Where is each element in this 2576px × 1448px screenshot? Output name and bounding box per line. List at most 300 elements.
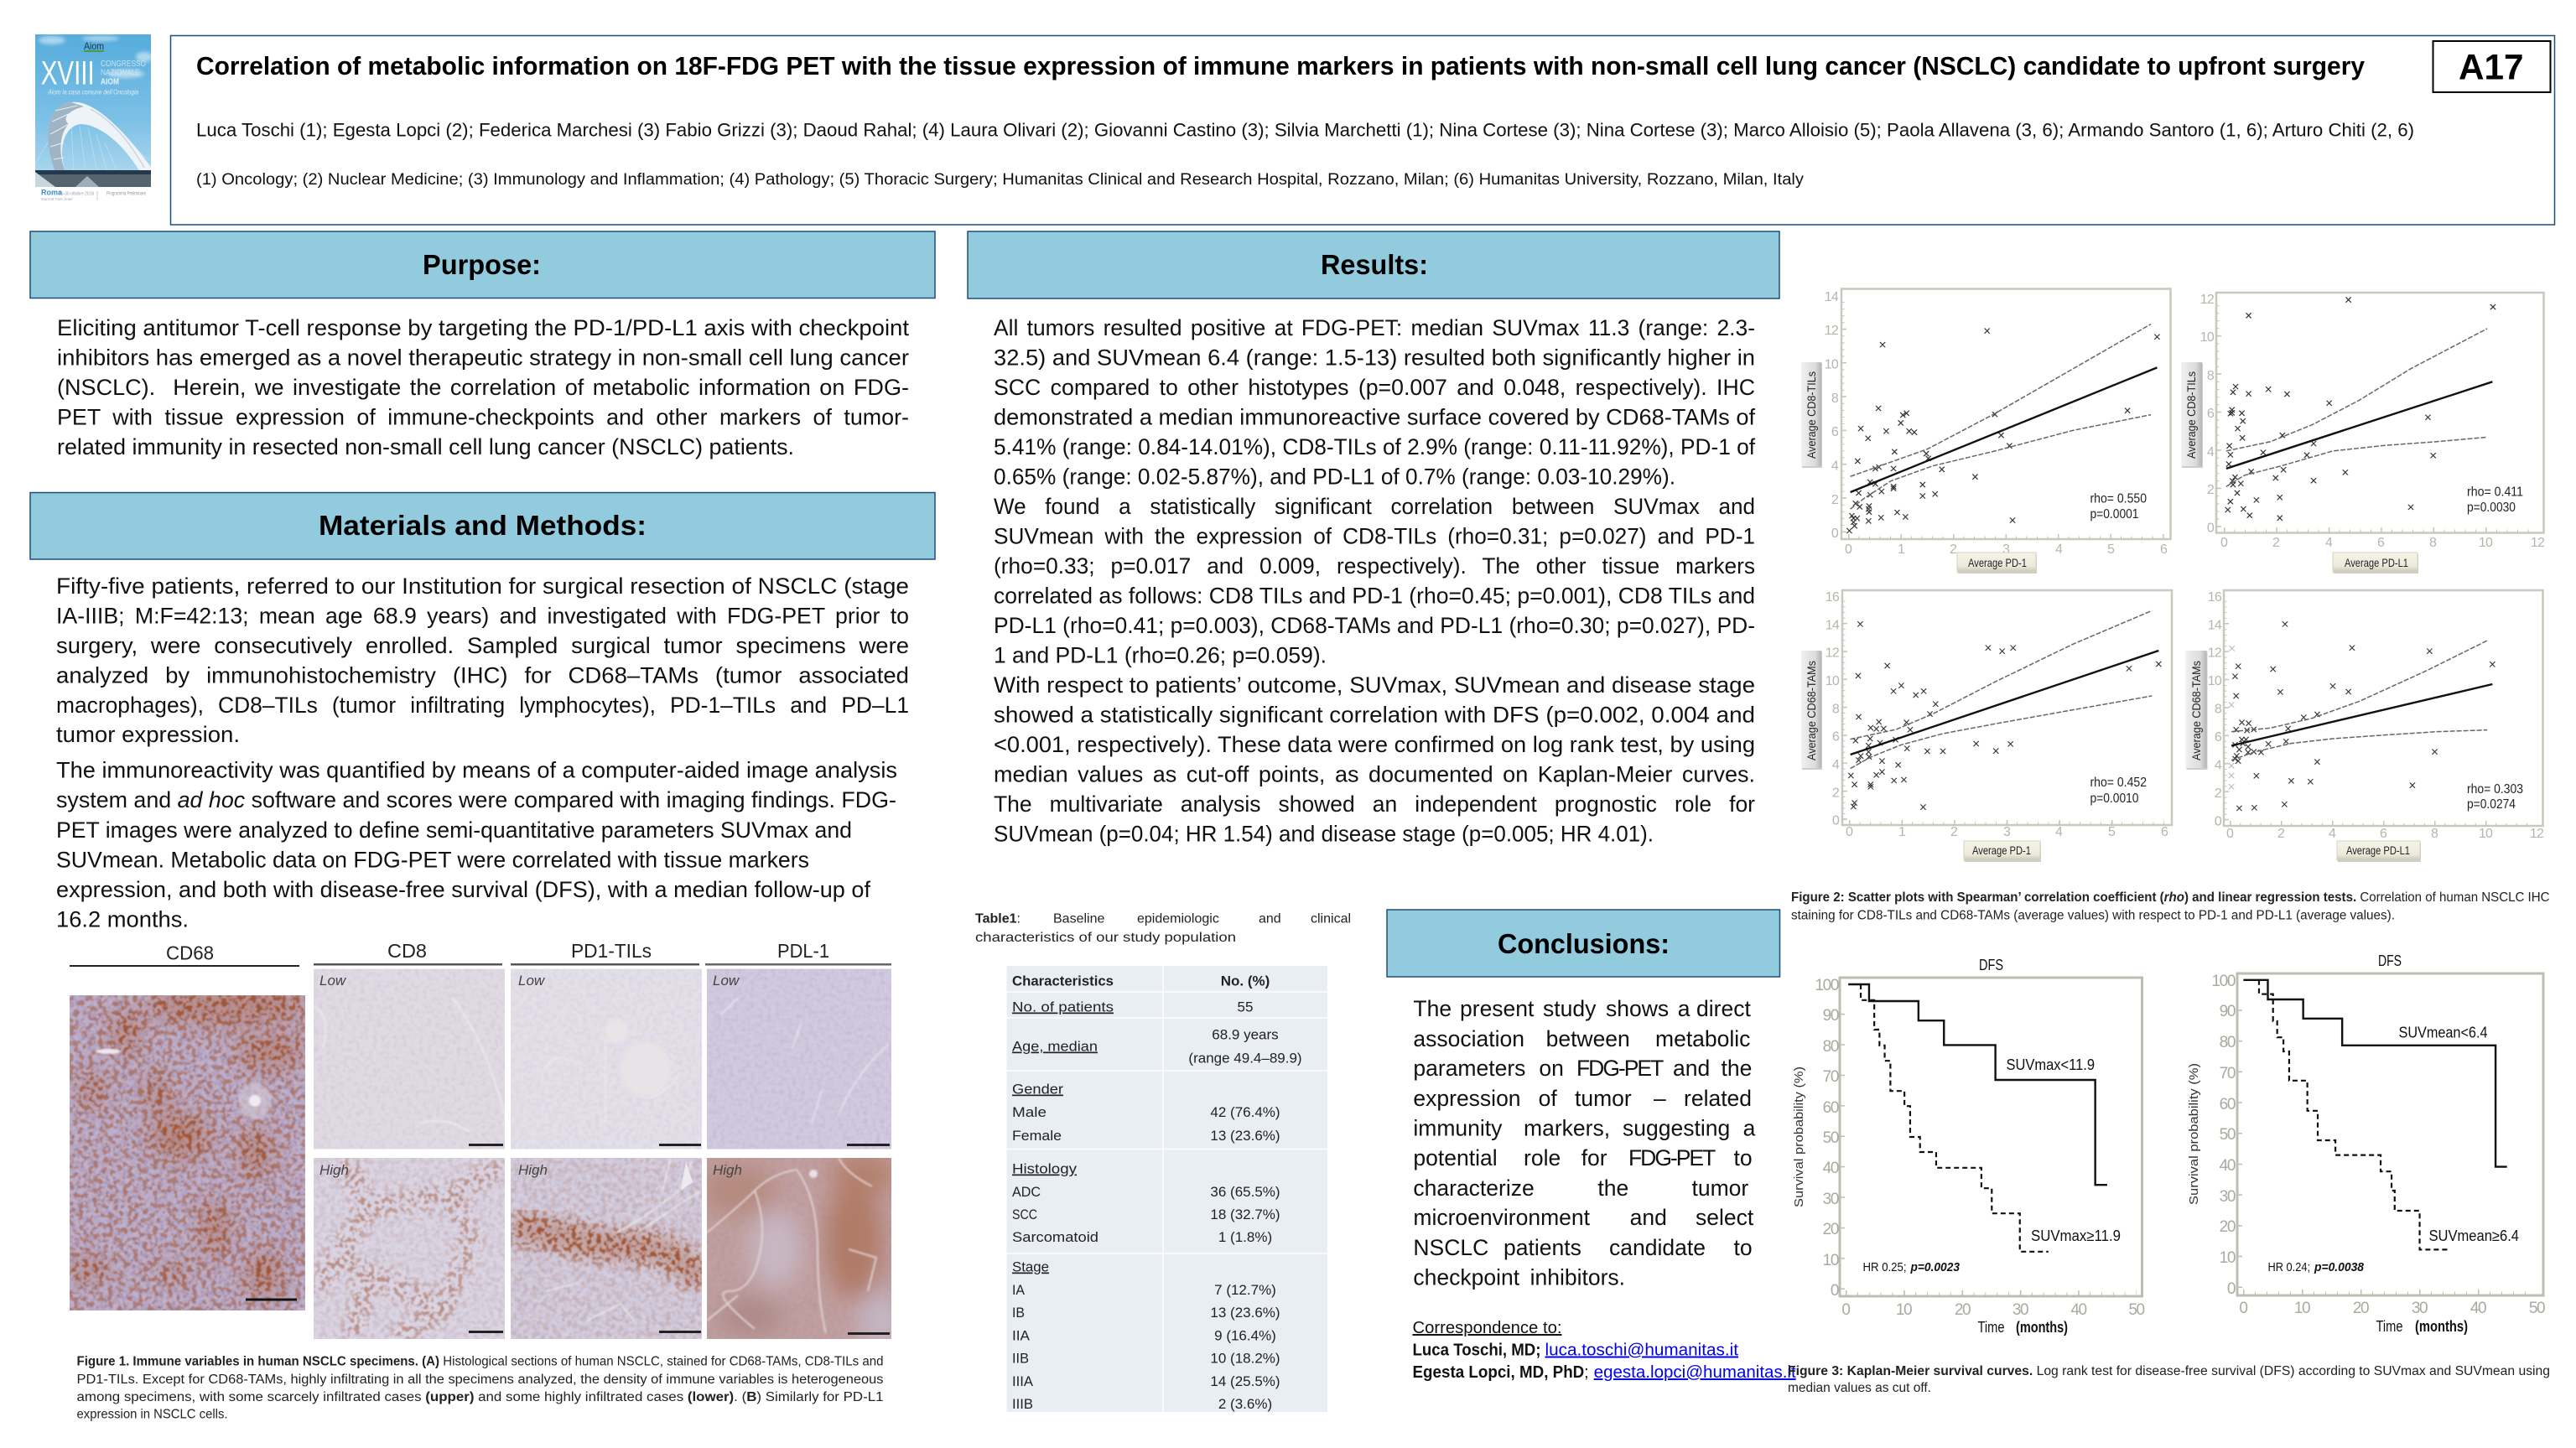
- table: baseline characteristics: (range 49.4–89.9): [1188, 1050, 1302, 1067]
- scatter plot: CD68-TAMs vs PD-1: 14: [1826, 618, 1840, 632]
- correlation annotation: rho= 0.452: [2090, 776, 2147, 790]
- text: Conclusions: candidate: [1609, 1235, 1706, 1260]
- text: Conclusions: between: [1546, 1026, 1630, 1051]
- x axis button: [2333, 553, 2418, 573]
- heading: Results: Results:: [1321, 249, 1428, 280]
- hazard ratio: p=0.0023: [1910, 1260, 1961, 1274]
- scatter plot: CD68-TAMs vs PD-L1: [2185, 590, 2544, 862]
- correlation annotation: p=0.0010: [2090, 791, 2139, 806]
- x axis button: Average PD-1: [1968, 556, 2027, 569]
- table: baseline characteristics: IIIB: [1012, 1396, 1033, 1412]
- scatter plot: CD68-TAMs vs PD-L1: 14: [2208, 618, 2222, 632]
- scatter plot: CD68-TAMs vs PD-1: 1: [1898, 825, 1906, 839]
- table: baseline characteristics: SCC: [1012, 1207, 1037, 1222]
- scatter plot: CD8-TILs vs PD-1: 5: [2107, 542, 2115, 557]
- scatter plot: CD8-TILs vs PD-1: 10: [1825, 357, 1839, 372]
- congress poster thumbnail: AIOM: [101, 77, 119, 86]
- text: Conclusions: potential: [1413, 1145, 1498, 1170]
- Kaplan-Meier plot: SUVmean: 60: [2220, 1096, 2236, 1113]
- congress poster thumbnail: Marriott Park Hotel: [41, 197, 73, 201]
- table: baseline characteristics: 36 (65.5%): [1210, 1184, 1280, 1200]
- text: Results: <0.001, respectively). These data were confirmed on log rank test, by using: [994, 732, 1755, 757]
- hazard ratio: [2267, 1260, 2365, 1274]
- table: baseline characteristics: 13 (23.6%): [1210, 1305, 1280, 1321]
- table: baseline characteristics: 14 (25.5%): [1210, 1373, 1280, 1389]
- text: Conclusions: NSCLC: [1413, 1235, 1488, 1260]
- text: Materials and Methods: [56, 573, 909, 932]
- figure 3 caption: [1788, 1364, 2550, 1395]
- scatter plot: CD68-TAMs vs PD-L1: 16: [2208, 590, 2222, 605]
- Kaplan-Meier plot: SUVmax: 0: [1831, 1282, 1839, 1300]
- x axis button: [2337, 841, 2421, 862]
- table: baseline characteristics: IIA: [1012, 1328, 1031, 1343]
- text: Conclusions: metabolic: [1655, 1026, 1750, 1051]
- text: Conclusions: inhibitors.: [1530, 1264, 1625, 1290]
- text: Conclusions: expression: [1413, 1086, 1521, 1111]
- scatter plot: CD68-TAMs vs PD-1: 16: [1826, 590, 1840, 605]
- authors: Luca Toschi (1); Egesta Lopci (2); Federica Marchesi (3) Fabio Grizzi (3); Daoud Rahal; (4) Laura Olivari (2); Giovanni Castino (3); Silvia Marchetti (1); Nina Cortese (3); Nina Cortese (3); Marco Alloisio (5); Paola Allavena (3, 6); Armando Santoro (1, 6); Arturo Chiti (2, 6): [196, 119, 2414, 141]
- Kaplan-Meier plot: SUVmean: 40: [2470, 1300, 2486, 1317]
- text: Conclusions: role: [1524, 1145, 1561, 1170]
- table: baseline characteristics: 18 (32.7%): [1210, 1207, 1280, 1222]
- correlation annotation: [2467, 782, 2523, 812]
- curve labels: [2006, 1056, 2121, 1244]
- congress poster thumbnail: NAZIONALE: [101, 68, 140, 77]
- scatter plot: CD8-TILs vs PD-L1: 2: [2272, 536, 2280, 550]
- scatter plot: CD68-TAMs vs PD-1: 0: [1832, 814, 1840, 828]
- scatter plot: CD8-TILs vs PD-1: 6: [2160, 542, 2168, 557]
- text: Purpose: [57, 315, 909, 459]
- scatter plot: CD68-TAMs vs PD-1: 6: [1832, 730, 1840, 745]
- affiliations: (1) Oncology; (2) Nuclear Medicine; (3) Immunology and Inflammation; (4) Pathology; (5) Thoracic Surgery; Humanitas Clinical and Research Hospital, Rozzano, Milan; (6) Humanitas University, Rozzano, Milan, Italy: [196, 171, 1805, 189]
- figure 1 caption: expression in NSCLC cells.: [77, 1407, 228, 1422]
- scatter plot: CD8-TILs vs PD-1: 0: [1831, 527, 1839, 541]
- table caption: epidemiologic: [1137, 912, 1219, 926]
- x axis label: (months): [2016, 1319, 2068, 1336]
- scatter plot: CD8-TILs vs PD-1: 8: [1831, 392, 1839, 406]
- Kaplan-Meier plot: SUVmean: 10: [2220, 1249, 2236, 1267]
- panel: PD1 low: [511, 969, 702, 1149]
- hazard ratio: [1863, 1260, 1961, 1274]
- text: Results: SCC compared to other histotypes (p=0.007 and 0.048, respectively). IHC: [994, 375, 1755, 400]
- congress poster thumbnail: Roma: [41, 188, 63, 196]
- text: Results: We found a statistically significant correlation between SUVmax and: [994, 494, 1755, 519]
- panel: PDL-1 high: High: [713, 1162, 742, 1178]
- figure 1 caption: PD1-TILs. Except for CD68-TAMs, highly infiltrating in all the specimens analyzed, the density of immune variables is heterogeneous: [77, 1373, 884, 1387]
- text: Conclusions: select: [1696, 1205, 1754, 1230]
- scatter plot: CD68-TAMs vs PD-1: 10: [1826, 674, 1840, 688]
- text: Results: SUVmean with the expression of CD8-TILs (rho=0.31; p=0.027) and PD-1: [994, 523, 1755, 548]
- text: Results: SUVmean (p=0.04; HR 1.54) and disease stage (p=0.005; HR 4.01).: [994, 822, 1654, 847]
- scatter plot: CD8-TILs vs PD-1: 1: [1898, 542, 1905, 557]
- heading: Conclusions: Conclusions:: [1498, 928, 1670, 959]
- Kaplan-Meier plot: SUVmean: 50: [2220, 1126, 2236, 1144]
- text: Conclusions: to: [1734, 1235, 1753, 1260]
- scatter plot: CD68-TAMs vs PD-L1: 12: [2208, 646, 2222, 661]
- Kaplan-Meier plot: SUVmax: 40: [2070, 1301, 2086, 1319]
- correlation annotation: rho= 0.411: [2467, 485, 2523, 500]
- figure 2 caption: Figure 2: Scatter plots with Spearman’ correlation coefficient (rho) and linear regression tests. Correlation of human NSCLC IHC: [1791, 890, 2549, 905]
- table: baseline characteristics: IIIA: [1012, 1373, 1034, 1389]
- table caption line 2: characteristics of our study population: [975, 931, 1236, 945]
- x axis button: Average PD-1: [1972, 843, 2031, 857]
- correspondence: Egesta Lopci, MD, PhD;: [1412, 1363, 1588, 1382]
- Kaplan-Meier plot: SUVmean: 0: [2227, 1280, 2236, 1298]
- text: Results: median values as cut-off points, as documented on Kaplan-Meier curves.: [994, 761, 1755, 786]
- text: Conclusions: parameters: [1413, 1056, 1525, 1081]
- correlation annotation: rho= 0.303: [2467, 782, 2523, 797]
- heading: Results: [968, 231, 1779, 298]
- y axis button: [1801, 362, 1822, 468]
- scatter plot: CD8-TILs vs PD-1: 4: [1831, 459, 1839, 473]
- text: Conclusions: patients: [1504, 1235, 1581, 1260]
- text: Results: [994, 315, 1756, 847]
- correlation annotation: [2467, 485, 2523, 515]
- panel: CD8 low: Low: [319, 973, 347, 989]
- plot title: DFS: [1979, 957, 2003, 973]
- table: baseline characteristics: IIB: [1012, 1350, 1029, 1367]
- curve labels: SUVmax≥11.9: [2031, 1227, 2121, 1244]
- table: baseline characteristics: Male: [1012, 1104, 1046, 1120]
- panel: CD8 high: [314, 1158, 505, 1339]
- text: Results: 1 and PD-L1 (rho=0.26; p=0.059).: [994, 642, 1327, 667]
- panel: PD1 high: [511, 1158, 702, 1339]
- x axis label: Time: [1977, 1319, 2004, 1336]
- scatter plot: CD68-TAMs vs PD-1: [1801, 590, 2172, 862]
- plot title: DFS: [2378, 952, 2402, 969]
- text: Materials and Methods: macrophages), CD8–TILs (tumor infiltrating lymphocytes), PD-1–TILs and PD–L1: [56, 693, 909, 718]
- panel: PDL-1 low: [707, 969, 891, 1149]
- x axis label: (months): [2415, 1318, 2468, 1335]
- congress poster thumbnail: XVIII: [41, 55, 95, 92]
- Kaplan-Meier plot: SUVmax: 90: [1823, 1007, 1839, 1025]
- heading: Materials and Methods: [30, 493, 935, 559]
- text: Conclusions: a: [1678, 996, 1690, 1021]
- Kaplan-Meier plot: SUVmax: 20: [1823, 1221, 1839, 1238]
- column headers: CD68: [166, 942, 214, 964]
- table: baseline characteristics: IB: [1012, 1305, 1025, 1321]
- text: Purpose: Eliciting antitumor T-cell response by targeting the PD-1/PD-L1 axis with checkpoint: [57, 315, 909, 340]
- scatter plot: CD68-TAMs vs PD-1: 3: [2003, 825, 2011, 839]
- scatter plot: CD8-TILs vs PD-L1: 10: [2479, 536, 2493, 550]
- Kaplan-Meier plot: SUVmean: 20: [2220, 1218, 2236, 1236]
- Kaplan-Meier plot: SUVmean: 30: [2220, 1188, 2236, 1206]
- figure 2 caption: [1791, 890, 2549, 922]
- text: Results: 32.5) and SUVmean 6.4 (range: 1.5-13) resulted both significantly higher in: [994, 345, 1755, 371]
- x axis label: [1977, 1319, 2068, 1336]
- table: baseline characteristics: 13 (23.6%): [1210, 1128, 1280, 1144]
- table: baseline characteristics: Histology: [1012, 1160, 1078, 1177]
- figure 3 caption: median values as cut off.: [1788, 1381, 1931, 1395]
- correspondence: Correspondence to:: [1412, 1319, 1561, 1337]
- heading: Conclusions: [1387, 910, 1779, 977]
- Kaplan-Meier plot: SUVmax: 10: [1823, 1252, 1839, 1269]
- Kaplan-Meier plot: SUVmean: 10: [2294, 1300, 2310, 1317]
- Kaplan-Meier plot: SUVmax: 10: [1896, 1301, 1912, 1319]
- figure 3 caption: Figure 3: Kaplan-Meier survival curves. Log rank test for disease-free survival (DFS) according to SUVmax and SUVmean using: [1788, 1364, 2550, 1378]
- curve labels: SUVmax<11.9: [2006, 1056, 2095, 1073]
- table caption: :: [1016, 912, 1021, 926]
- correspondence: Luca Toschi, MD;: [1412, 1342, 1541, 1360]
- scatter plot: CD8-TILs vs PD-1: 3: [2002, 542, 2010, 557]
- curve labels: SUVmean≥6.4: [2428, 1227, 2519, 1244]
- scatter plot: CD68-TAMs vs PD-L1: 10: [2208, 674, 2222, 688]
- table caption: Table1: [975, 912, 1017, 926]
- text: Conclusions: to: [1734, 1145, 1753, 1170]
- curve labels: SUVmean<6.4: [2398, 1025, 2487, 1041]
- correlation annotation: [2090, 776, 2147, 806]
- text: Conclusions: and: [1673, 1056, 1710, 1081]
- correspondence: egesta.lopci@humanitas.it: [1594, 1363, 1796, 1382]
- scatter plot: CD68-TAMs vs PD-L1: 0: [2215, 814, 2222, 828]
- y axis button: Average CD8-TILs: [1805, 371, 1818, 459]
- congress poster thumbnail: [35, 34, 153, 201]
- hazard ratio: HR 0.25;: [1863, 1260, 1907, 1274]
- heading: Purpose: Purpose:: [423, 249, 541, 280]
- text: Materials and Methods: expression, and both with disease-free survival (DFS), with a median follow-up of: [56, 877, 870, 902]
- title: Correlation of metabolic information on 18F-FDG PET with the tissue expression of immune markers in patients with non-small cell lung cancer (NSCLC) candidate to upfront surgery: [196, 51, 2366, 80]
- text: Results: The multivariate analysis showed an independent prognostic role for: [994, 791, 1755, 817]
- Kaplan-Meier plot: SUVmax: 80: [1823, 1038, 1839, 1056]
- text: Purpose: (NSCLC). Herein, we investigate the correlation of metabolic information on FDG-: [57, 375, 909, 400]
- figure 2 caption: staining for CD8-TILs and CD68-TAMs (average values) with respect to PD-1 and PD-L1 (average values).: [1791, 909, 2395, 922]
- scatter plot: CD68-TAMs vs PD-L1: 4: [2215, 758, 2222, 773]
- text: Conclusions: [1413, 996, 1756, 1290]
- scatter plot: CD8-TILs vs PD-1: 6: [1831, 425, 1839, 439]
- table: baseline characteristics: 7 (12.7%): [1214, 1282, 1276, 1298]
- text: Conclusions: the: [1721, 1056, 1752, 1081]
- text: Conclusions: tumor: [1692, 1176, 1748, 1201]
- Kaplan-Meier plot: SUVmax: 20: [1955, 1301, 1971, 1319]
- scatter plot: CD8-TILs vs PD-1: 2: [1950, 542, 1957, 557]
- correlation annotation: rho= 0.550: [2090, 491, 2147, 506]
- panel: PD1 low: Low: [518, 973, 546, 989]
- scatter plot: CD68-TAMs vs PD-L1: 8: [2431, 827, 2438, 841]
- Kaplan-Meier plot: SUVmean: 50: [2529, 1300, 2545, 1317]
- scatter plot: CD8-TILs vs PD-1: 4: [2055, 542, 2063, 557]
- table: baseline characteristics: Female: [1012, 1128, 1062, 1144]
- scatter plot: CD68-TAMs vs PD-1: 2: [1832, 786, 1840, 800]
- scatter plot: CD68-TAMs vs PD-1: 0: [1846, 825, 1853, 839]
- text: Conclusions: shows: [1606, 996, 1669, 1021]
- Kaplan-Meier plot: SUVmax: 50: [2128, 1301, 2144, 1319]
- panel: CD8 high: High: [319, 1162, 349, 1178]
- congress poster thumbnail: Programma Preliminare: [106, 192, 146, 197]
- scatter plot: CD68-TAMs vs PD-1: 8: [1832, 702, 1840, 716]
- correlation annotation: p=0.0030: [2467, 501, 2516, 515]
- scatter plot: CD8-TILs vs PD-L1: 6: [2377, 536, 2385, 550]
- Kaplan-Meier plot: SUVmax: 50: [1823, 1129, 1839, 1147]
- y axis label: Survival probability (%): [1792, 1067, 1806, 1207]
- text: Conclusions: direct: [1696, 996, 1751, 1021]
- scatter plot: CD8-TILs vs PD-1: 0: [1845, 542, 1852, 557]
- scatter plot: CD68-TAMs vs PD-1: 5: [2108, 825, 2116, 839]
- panel: PDL-1 low: Low: [713, 973, 740, 989]
- scatter plot: CD8-TILs vs PD-L1: 10: [2200, 330, 2215, 345]
- table: baseline characteristics: 9 (16.4%): [1214, 1328, 1276, 1343]
- Kaplan-Meier plot: SUVmean: 40: [2220, 1157, 2236, 1175]
- poster code badge: A17: [2459, 48, 2524, 88]
- text: Conclusions: and: [1630, 1205, 1667, 1230]
- congress poster thumbnail: CONGRESSO: [101, 60, 146, 69]
- scatter plot: CD8-TILs vs PD-L1: 6: [2207, 407, 2215, 421]
- Kaplan-Meier plot: SUVmean: 90: [2220, 1003, 2236, 1020]
- text: Conclusions: related: [1684, 1086, 1752, 1111]
- congress poster thumbnail: Aiom: [84, 40, 104, 52]
- scatter plot: CD68-TAMs vs PD-1: 4: [1832, 758, 1840, 772]
- text: Materials and Methods: Fifty-five patients, referred to our Institution for surgical resection of NSCLC (stage: [56, 573, 909, 599]
- x axis button: Average PD-L1: [2346, 843, 2410, 857]
- text: Conclusions: the: [1597, 1176, 1628, 1201]
- scatter plot: CD8-TILs vs PD-1: 12: [1825, 324, 1839, 338]
- curve labels: [2398, 1025, 2519, 1244]
- x axis button: [1964, 841, 2041, 862]
- text: Conclusions: of: [1539, 1086, 1557, 1111]
- table: baseline characteristics: 55: [1238, 999, 1253, 1015]
- Kaplan-Meier plot: SUVmax: 40: [1823, 1160, 1839, 1177]
- column headers: [70, 940, 891, 967]
- table: baseline characteristics: No. (%): [1221, 973, 1270, 989]
- text: Materials and Methods: PET images were analyzed to define semi-quantitative parameters SUVmax and: [56, 817, 852, 843]
- y axis button: [2185, 651, 2207, 770]
- scatter plot: CD8-TILs vs PD-L1: 2: [2207, 483, 2215, 497]
- scatter plot: CD8-TILs vs PD-L1: 4: [2207, 445, 2215, 459]
- text: Conclusions: checkpoint: [1413, 1264, 1520, 1290]
- y axis button: Average CD8-TILs: [2184, 371, 2198, 459]
- hazard ratio: p=0.0038: [2314, 1260, 2365, 1274]
- scatter plot: CD68-TAMs vs PD-L1: 10: [2479, 827, 2493, 841]
- y axis button: Average CD68-TAMs: [2189, 661, 2203, 760]
- text: Results: demonstrated a median immunoreactive surface covered by CD68-TAMs of: [994, 404, 1756, 429]
- Kaplan-Meier plot: SUVmax: 30: [1823, 1191, 1839, 1208]
- congress poster thumbnail: Aiom la casa comune dell’Oncologia: [48, 88, 139, 96]
- table: baseline characteristics: IA: [1012, 1282, 1026, 1298]
- correspondence: luca.toschi@humanitas.it: [1545, 1342, 1738, 1360]
- table: baseline characteristics: 10 (18.2%): [1210, 1350, 1280, 1367]
- figure 1 caption: Figure 1. Immune variables in human NSCLC specimens. (A) Histological sections of human NSCLC, stained for CD68-TAMs, CD8-TILs and: [77, 1355, 884, 1368]
- text: Results: With respect to patients’ outcome, SUVmax, SUVmean and disease stage: [994, 672, 1755, 698]
- table: baseline characteristics: 2 (3.6%): [1218, 1396, 1272, 1412]
- table: baseline characteristics: 1 (1.8%): [1218, 1229, 1272, 1245]
- text: Results: (rho=0.33; p=0.017 and 0.009, respectively). The other tissue markers: [994, 553, 1755, 579]
- scatter plot: CD8-TILs vs PD-L1: 0: [2207, 522, 2215, 536]
- table: baseline characteristics: Stage: [1012, 1259, 1049, 1274]
- congress poster thumbnail: 26-30 ottobre 2016: [59, 191, 94, 196]
- table: baseline characteristics: ADC: [1012, 1184, 1041, 1200]
- x axis button: Average PD-L1: [2345, 556, 2408, 569]
- panel: PD1 high: High: [518, 1162, 548, 1178]
- Kaplan-Meier plot: SUVmean: 30: [2412, 1300, 2428, 1317]
- scatter plot: CD8-TILs vs PD-1: [1801, 288, 2170, 573]
- scatter plot: CD8-TILs vs PD-L1: 12: [2200, 293, 2215, 307]
- scatter plot: CD68-TAMs vs PD-L1: 2: [2215, 786, 2222, 801]
- table caption: Baseline: [1053, 912, 1104, 926]
- poster code badge: [2433, 41, 2551, 92]
- scatter plot: CD68-TAMs vs PD-L1: 6: [2215, 730, 2222, 745]
- Kaplan-Meier plot: SUVmean: 100: [2211, 973, 2236, 990]
- Kaplan-Meier plot: SUVmax: 30: [2012, 1301, 2028, 1319]
- table: baseline characteristics: 42 (76.4%): [1210, 1104, 1280, 1120]
- Kaplan-Meier plot: SUVmax: 100: [1815, 977, 1839, 994]
- text: Conclusions: suggesting: [1623, 1116, 1730, 1141]
- Kaplan-Meier plot: SUVmean: 70: [2220, 1065, 2236, 1082]
- figure 1: histology panels: [68, 940, 901, 1349]
- scatter plot: CD8-TILs vs PD-1: 14: [1825, 290, 1839, 304]
- Kaplan-Meier plot: SUVmean: 0: [2239, 1300, 2247, 1317]
- correlation annotation: p=0.0274: [2467, 797, 2516, 812]
- text: Conclusions: characterize: [1413, 1176, 1535, 1201]
- text: Conclusions: FDG-PET: [1576, 1056, 1664, 1081]
- scatter plot: CD8-TILs vs PD-L1: 8: [2207, 369, 2215, 383]
- panel: CD68: [70, 995, 305, 1310]
- scatter plot: CD8-TILs vs PD-L1: [2181, 293, 2545, 573]
- text: Conclusions: for: [1581, 1145, 1607, 1170]
- text: Conclusions: association: [1413, 1026, 1524, 1051]
- correspondence: [1412, 1319, 1796, 1382]
- correlation annotation: p=0.0001: [2090, 507, 2139, 522]
- text: Materials and Methods: The immunoreactivity was quantified by means of a computer-aided image analysis: [56, 758, 897, 783]
- scatter plot: CD68-TAMs vs PD-1: 2: [1950, 825, 1958, 839]
- scatter plot: CD8-TILs vs PD-L1: 12: [2531, 536, 2545, 550]
- table: baseline characteristics: [1006, 966, 1327, 1412]
- Kaplan-Meier plot: SUVmean: [2187, 952, 2545, 1335]
- scatter plot: CD68-TAMs vs PD-L1: 2: [2277, 827, 2285, 841]
- y axis label: Survival probability (%): [2187, 1063, 2201, 1205]
- text: Materials and Methods: surgery, were consecutively enrolled. Sampled surgical tumor specimens were: [56, 633, 909, 658]
- scatter plot: CD68-TAMs vs PD-1: 6: [2161, 825, 2168, 839]
- text: Conclusions: FDG-PET: [1628, 1145, 1716, 1170]
- figure 1 caption: [77, 1355, 884, 1422]
- scatter plot: CD8-TILs vs PD-L1: 0: [2220, 536, 2228, 550]
- y axis button: [1801, 651, 1822, 770]
- text: Results: 5.41% (range: 0.84-14.01%), CD8-TILs of 2.9% (range: 0.11-11.92%), PD-1 of: [994, 434, 1755, 459]
- column headers: CD8: [387, 940, 427, 962]
- heading: Materials and Methods: Materials and Methods:: [319, 510, 647, 541]
- text: Results: showed a statistically significant correlation with DFS (p=0.002, 0.004 and: [994, 703, 1755, 728]
- text: Conclusions: present: [1460, 996, 1535, 1021]
- x axis label: [2376, 1318, 2468, 1335]
- text: Conclusions: –: [1654, 1086, 1666, 1111]
- text: Conclusions: immunity: [1413, 1116, 1503, 1141]
- text: Conclusions: The: [1413, 996, 1452, 1021]
- text: Purpose: related immunity in resected non-small cell lung cancer (NSCLC) patients.: [57, 434, 794, 459]
- text: Conclusions: a: [1743, 1116, 1756, 1141]
- text: Purpose: PET with tissue expression of immune-checkpoints and other markers of tumor-: [57, 404, 909, 429]
- scatter plot: CD68-TAMs vs PD-L1: 6: [2380, 827, 2387, 841]
- Kaplan-Meier plot: SUVmean: 20: [2353, 1300, 2369, 1317]
- text: Materials and Methods: SUVmean. Metabolic data on FDG-PET were correlated with tissue markers: [56, 847, 809, 872]
- text: Conclusions: on: [1539, 1056, 1564, 1081]
- scatter plot: CD68-TAMs vs PD-L1: 0: [2226, 827, 2234, 841]
- y axis button: Average CD68-TAMs: [1805, 661, 1818, 760]
- text: Purpose: inhibitors has emerged as a novel therapeutic strategy in non-small cell lung cancer: [57, 345, 909, 371]
- panel: CD8 low: [314, 969, 505, 1149]
- table: baseline characteristics: Sarcomatoid: [1012, 1229, 1098, 1245]
- text: Conclusions: microenvironment: [1413, 1205, 1591, 1230]
- table: baseline characteristics: No. of patients: [1012, 999, 1114, 1015]
- scatter plot: CD68-TAMs vs PD-L1: 12: [2530, 827, 2544, 841]
- table: baseline characteristics: 68.9 years: [1212, 1026, 1279, 1043]
- text: Conclusions: study: [1543, 996, 1597, 1021]
- scatter plot: CD68-TAMs vs PD-L1: 4: [2329, 827, 2336, 841]
- table: baseline characteristics: Age, median: [1012, 1038, 1098, 1055]
- hazard ratio: HR 0.24;: [2267, 1260, 2310, 1274]
- Kaplan-Meier plot: SUVmax: [1792, 957, 2144, 1336]
- table caption: and: [1259, 912, 1281, 926]
- scatter plot: CD8-TILs vs PD-L1: 8: [2429, 536, 2437, 550]
- Kaplan-Meier plot: SUVmax: 70: [1823, 1068, 1839, 1086]
- x axis button: [1957, 553, 2037, 573]
